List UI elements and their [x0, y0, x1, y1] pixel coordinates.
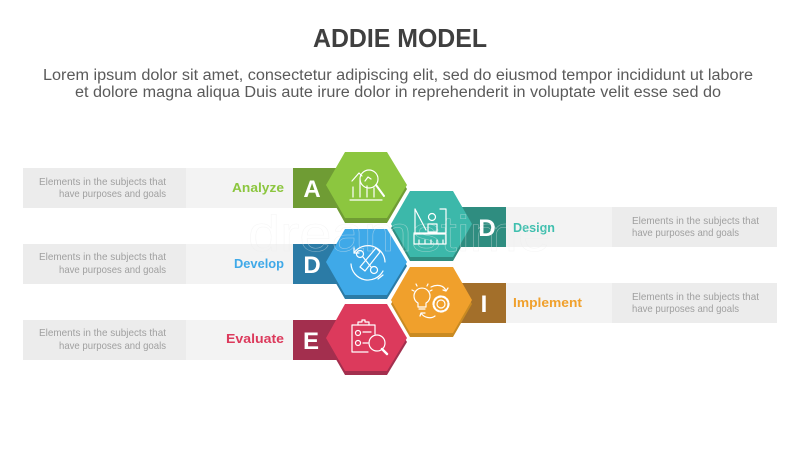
letter tab: D design [456, 207, 506, 247]
panel: implement bar: Implement [513, 296, 583, 310]
hexagon: implement [391, 267, 472, 337]
letter tab: D design: D [478, 215, 496, 242]
letter tab: D develop: D [303, 252, 321, 279]
watermark: dreamstime [248, 206, 550, 262]
hexagon: develop [326, 229, 407, 299]
panel: develop bar [23, 244, 293, 284]
letter tab: E: E [303, 328, 319, 355]
icon: blueprint and ruler [414, 209, 446, 244]
letter tab: E [293, 320, 343, 360]
letter tab: I: I [481, 291, 487, 318]
letter tab: A [293, 168, 343, 208]
panel: evaluate bar: have purposes and goals [59, 340, 166, 352]
panel: evaluate bar: Evaluate [226, 332, 284, 346]
subtitle text [43, 67, 753, 101]
panel: design bar [506, 207, 777, 247]
panel: analyze bar: have purposes and goals [59, 188, 166, 200]
hexagon: design [391, 191, 472, 261]
panel: analyze bar [23, 168, 293, 208]
panel: implement bar: have purposes and goals [632, 303, 739, 315]
hexagon: evaluate [326, 304, 407, 375]
subtitle text: et dolore magna aliqua Duis aute irure dolor in reprehenderit in voluptate velit esse sed do [75, 84, 721, 101]
letter tab: D develop [293, 244, 343, 284]
panel: develop bar: have purposes and goals [59, 264, 166, 276]
panel: analyze bar: Elements in the subjects that [39, 176, 166, 188]
icon: tools in circular arrows [351, 246, 385, 280]
panel: develop bar: Elements in the subjects that [39, 251, 166, 263]
letter tab: A: A [303, 176, 321, 203]
panel: implement bar: Elements in the subjects that [632, 291, 759, 303]
panel: design bar: Design [513, 221, 555, 235]
panel: implement bar [506, 283, 777, 323]
panel: evaluate bar: Elements in the subjects that [39, 327, 166, 339]
panel: design bar: Elements in the subjects that [632, 215, 759, 227]
icon: chart and magnifier [350, 170, 384, 200]
icon: lightbulb, gear and arrows [412, 284, 448, 318]
panel: design bar: have purposes and goals [632, 227, 739, 239]
panel: develop bar: Develop [234, 257, 284, 271]
subtitle text: Lorem ipsum dolor sit amet, consectetur adipiscing elit, sed do eiusmod tempor incididunt ut labore [43, 67, 753, 84]
title: ADDIE MODEL [313, 23, 487, 53]
letter tab: I [456, 283, 506, 323]
panel: analyze bar: Analyze [232, 181, 284, 195]
hexagon: analyze [326, 152, 407, 223]
panel: evaluate bar [23, 320, 293, 360]
icon: clipboard and magnifier [352, 320, 387, 354]
